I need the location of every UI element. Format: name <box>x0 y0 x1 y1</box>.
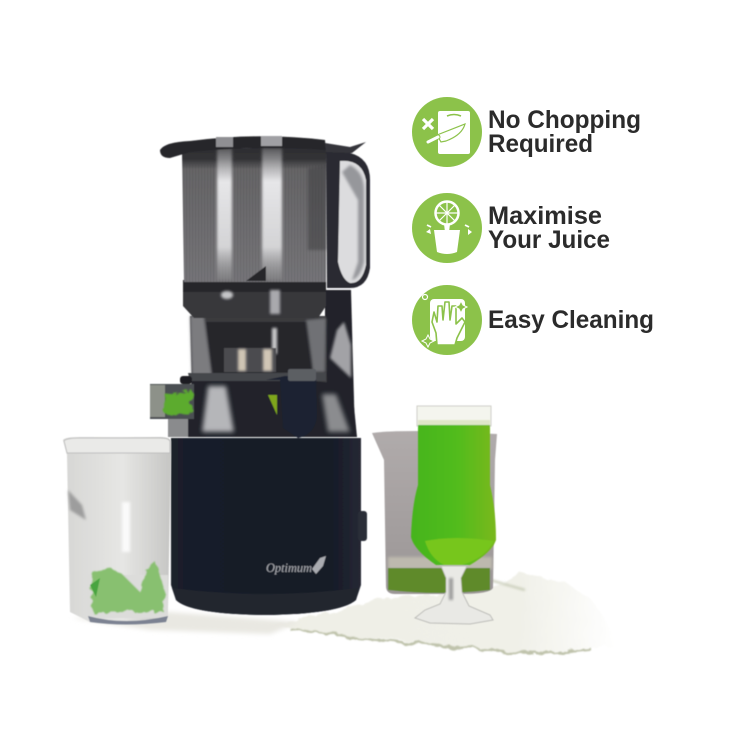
feature: easy cleaning <box>412 285 654 355</box>
text: Required <box>488 130 593 158</box>
text: No Chopping <box>488 106 641 134</box>
juice spout <box>266 369 317 438</box>
text: Your Juice <box>488 226 610 254</box>
glass of green juice <box>411 406 496 624</box>
feature: maximise your juice <box>412 193 610 263</box>
juice pitcher <box>372 431 497 594</box>
juicer motor base <box>171 438 367 615</box>
pulp outlet <box>150 376 194 437</box>
juicer <box>150 136 370 615</box>
icon: citrus squeezed into cup <box>412 193 482 263</box>
steel strainer <box>224 348 276 372</box>
right column <box>325 290 355 437</box>
text: Maximise <box>488 202 602 230</box>
towel under the glass <box>272 573 616 655</box>
logo: Optimum <box>266 560 312 575</box>
icon: hand wiping <box>412 285 482 355</box>
handle <box>325 142 370 288</box>
floor shadow <box>72 612 300 634</box>
feature: no chopping required <box>412 97 641 167</box>
logo kangaroo <box>312 556 326 574</box>
lower chamber <box>190 316 327 392</box>
pulp container <box>63 437 171 624</box>
hopper <box>160 136 326 318</box>
text: Easy Cleaning <box>488 306 654 334</box>
juicer upper body <box>168 373 357 437</box>
green pulp <box>92 562 164 612</box>
icon: chopping board and knife <box>412 97 482 167</box>
